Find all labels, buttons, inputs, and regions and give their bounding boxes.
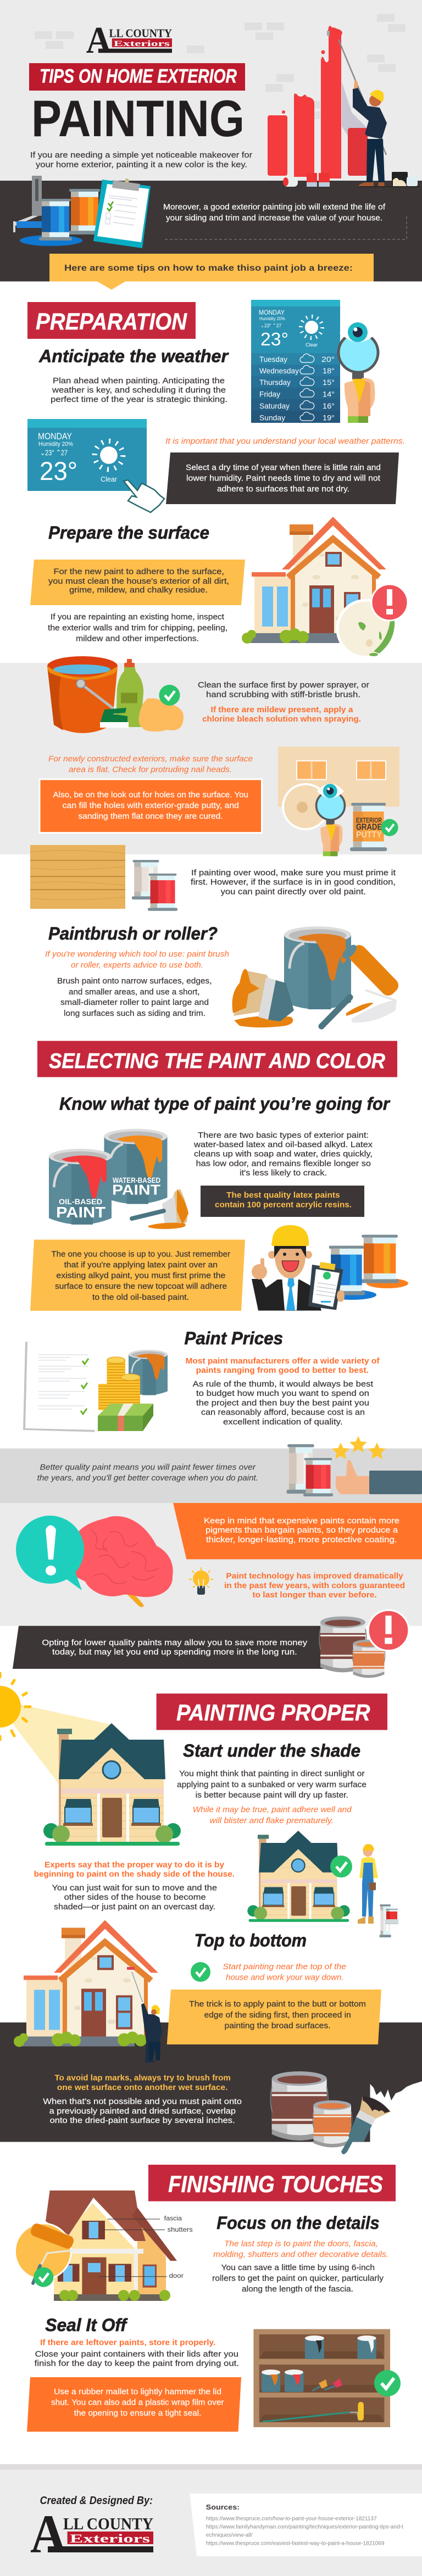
heading: seal it off: Seal It Off [45,2315,128,2335]
panel: best quality latex: contain 100 percent acrylic resins. [215,1201,352,1210]
text: lap marks: one wet surface onto another wet surface. [57,2083,227,2092]
logo: All County Exteriors: A [86,20,112,62]
section heading: painting proper: PAINTING PROPER [176,1700,370,1725]
text: last step: molding, shutters and other decorative details. [213,2250,388,2259]
weather forecast panel: 15° [323,378,335,387]
text: leftover paints: If there are leftover paints, store it properly. [40,2339,215,2348]
illustration: wall, magnifier, putty can: PUTTY [356,830,382,840]
illustration: wall, magnifier, putty can: EXTERIOR [356,816,382,824]
icon: green check [191,1962,210,1982]
weather forecast panel: 16° [323,401,335,410]
logo: All County Exteriors: LL COUNTY [109,26,172,40]
text: paint technology: to last longer than ever before. [252,1591,377,1600]
text: plan ahead [51,377,227,404]
illustration: water and oil paint cans: PAINT [56,1204,106,1221]
text: brush paint: long surfaces such as siding and trim. [64,1009,206,1018]
section heading: finishing touches [148,2165,396,2201]
panel: adhere to surface: you must clean the house's exterior of all dirt, [48,577,229,586]
text: when not possible: a previously painted and dried surface, overlap [49,2107,236,2116]
panel: rubber mallet: Use a rubber mallet to lightly hammer the lid [54,2388,221,2396]
weather card [27,419,147,491]
text: when not possible: When that's not possible and you must paint onto [43,2098,242,2106]
text: plan ahead: weather is key, and scheduling it during the [52,386,226,395]
illustration: water and oil paint cans: WATER-BASED [113,1176,160,1184]
panel: the trick: The trick is to apply paint to the butt or bottom [189,2000,366,2009]
text: close containers: Close your paint containers with their lids after you [35,2350,238,2359]
logo: All County Exteriors: Exteriors [114,39,170,48]
panel: dry time of year: lower humidity. Paint needs time to dry and will not [186,474,380,483]
text: two types of paint: it's less likely to crack. [240,1169,327,1178]
footer credit: created and designed by: Created & Designed By: [40,2495,153,2507]
section heading: selecting the paint and color [37,1041,397,1077]
text: clean the surface: hand scrubbing with stiff-bristle brush. [206,691,360,700]
panel: sources [190,2494,422,2556]
weather forecast panel: 20° [321,355,335,364]
callout: better quality paint: Better quality paint means you will paint fewer times over [40,1463,256,1472]
text: wait for sun: shaded—or just paint on an overcast day. [54,1903,215,1912]
heading: anticipate the weather: Anticipate the weather [38,346,229,366]
intro text: your home exterior, painting it a new color is the key. [36,160,247,169]
panel: best quality latex [201,1186,364,1217]
text: two types of paint: There are two basic types of exterior paint: [198,1131,369,1140]
text: lap marks: To avoid lap marks, always try to brush from [54,2074,231,2083]
text: paint technology: in the past few years, with colors guaranteed [224,1582,405,1590]
text: lap marks [54,2074,231,2092]
illustration: sun with light beam [0,1672,115,1785]
text: manufacturers offer [186,1357,380,1375]
text: experts say: beginning to paint on the shady side of the house. [34,1870,235,1879]
text: newly constructed: For newly constructed exteriors, make sure the surface [48,755,253,763]
weather forecast panel: Clear [306,342,318,348]
text: moreover: your siding and trim and increase the value of your house. [166,214,382,223]
text: direct sunlight [177,1769,367,1800]
text: when not possible: onto the dried-paint surface by several inches. [50,2116,235,2125]
intro text [30,151,252,169]
callout: expensive paints [173,1503,422,1560]
panel: lower quality paints [13,1626,324,1669]
panel: the one you choose: that if you're applying latex paint over an [64,1261,218,1270]
text: experts say [34,1860,235,1879]
footer logo [30,2504,153,2564]
text: paint technology: Paint technology has improved dramatically [226,1572,403,1581]
text: start near the top: house and work your way down. [226,1973,344,1982]
text: mildew warning: If there are mildew present, apply a [211,706,354,714]
decorative bricks [35,14,406,119]
text: repainting: the exterior walls and trim for chipping, peeling, [48,624,227,633]
text: newly constructed: area is flat. Check for protruding nail heads. [69,765,232,774]
panel: rubber mallet: shut. You can also add a plastic wrap film over [51,2398,224,2407]
illustration: contractor with clipboard and cans [252,1225,408,1311]
text: blister warning: will blister and flake prematurely. [210,1816,334,1825]
panel: sources: https://www.thespruce.com/easiest-fastest-way-to-paint-a-house-1821069 [206,2540,385,2546]
illustration: small house with worker [247,1831,398,1937]
illustration: orange roof house with painter [14,1920,162,2063]
text: moreover: Moreover, a good exterior painting job will extend the life of [163,203,386,212]
panel: sources: Sources: [206,2503,240,2511]
weather card: ⌄23° ⌃27 [40,448,68,457]
illustration: wood planks and cans [30,845,177,911]
weather forecast panel: Friday [259,390,280,399]
panel: sources: https://www.thespruce.com/how-to-paint-your-house-exterior-1821137 [206,2515,377,2522]
illustration: cans, thumbs up, stars [287,1436,422,1496]
weather forecast panel: 23° [260,329,288,349]
icon: magnifier with eye [338,322,378,423]
weather forecast panel: 19° [323,413,335,422]
panel: sources: echniques/view-all/ [206,2532,252,2538]
weather card: 23° [40,456,77,485]
callout: expensive paints: Keep in mind that expensive paints contain more [204,1517,399,1526]
weather card: Humidity 20% [38,441,73,448]
illustration: bucket, bottle, sponge [47,656,184,733]
text: experts say: Experts say that the proper way to do it is by [45,1860,224,1869]
text: 6-inch rollers: You can save a little time by using 6-inch [221,2264,375,2272]
section heading: selecting the paint and color: SELECTING THE PAINT AND COLOR [49,1049,385,1073]
panel: the one you choose [30,1240,245,1311]
weather forecast panel: 14° [323,390,335,399]
text: painting over wood: you can paint directly over old paint. [221,888,366,897]
heading: paintbrush or roller: Paintbrush or roller? [48,924,218,943]
text: tool advice [45,949,229,970]
text: clean the surface [198,681,369,700]
text: wait for sun [52,1884,217,1912]
illustration: brown roof house with labels [15,2191,193,2301]
weather card: MONDAY [38,431,72,442]
heading: start under the shade: Start under the shade [183,1741,360,1761]
panel: the one you choose: existing alkyd paint, you must first prime the [56,1272,225,1281]
text: start near the top: Start painting near the top of the [223,1962,346,1971]
weather forecast panel: MONDAY [259,309,285,316]
panel: best quality latex: The best quality latex paints [226,1191,340,1200]
illustration: wall, magnifier, putty can: GRADE [356,823,382,832]
text: repainting: If you are repainting an existing home, inspect [51,613,224,622]
text: moreover [163,203,407,239]
section heading: preparation: PREPARATION [36,309,187,335]
text: last step [213,2239,388,2259]
text: wait for sun: You can just wait for sun to move and the [52,1884,217,1892]
panel: the one you choose: to the old oil-based paint. [92,1293,189,1302]
text: rule of thumb: can reasonably afford, because cost is an [201,1409,365,1417]
heading: top to bottom: Top to bottom [195,1931,307,1951]
text: rule of thumb: the project and then buy the best paint you [196,1399,369,1408]
illustration: cheap paint buckets with alert [319,1610,409,1678]
panel: holes on surface [40,779,262,833]
panel: holes on surface: sanding them flat once they are cured. [78,812,223,821]
text: two types of paint: cleans up with soap and water, dries quickly, [194,1150,373,1159]
weather forecast panel: ⌄23° ⌃27 [260,323,281,329]
text: direct sunlight: applying paint to a sunbaked or very warm surface [177,1780,367,1789]
section heading: preparation [27,302,196,339]
text: two types of paint: has low odor, and remains flexible longer so [196,1159,371,1168]
text: rule of thumb [193,1380,373,1427]
text: manufacturers offer: paints ranging from good to better to best. [196,1366,369,1375]
callout: expensive paints: thicker, longer-lasting, more protective coating. [206,1535,397,1544]
panel: holes on surface: can fill the holes with exterior-grade putty, and [63,802,239,811]
text: brush paint: small-diameter roller to paint large and [60,998,209,1007]
illustration: wall, magnifier, putty can [278,747,399,856]
panel: dry time of year: Select a dry time of year when there is little rain and [186,463,381,472]
text: plan ahead: Plan ahead when painting. Anticipating the [53,377,225,385]
text: when not possible [43,2098,242,2125]
text: tool advice: or roller, experts advice to use both. [71,960,203,970]
text: repainting: mildew and other imperfections. [76,635,199,644]
callout: better quality paint: the years, and you'll get better coverage when you do paint. [37,1473,258,1483]
panel: sources: https://www.familyhandyman.com/painting/techniques/exterior-painting-tips-and-t [206,2523,403,2530]
weather forecast panel: Humidity 20% [259,316,285,321]
text: brush paint [57,977,212,1018]
weather forecast panel: Saturday [259,401,290,410]
text: start near the top [223,1962,346,1982]
illustration: water and oil paint cans: PAINT [112,1182,160,1198]
callout: local weather patterns: It is important that you understand your local weather patterns. [165,437,405,446]
illustration: buckets and brush [270,2071,391,2154]
illustration: brain with alert bubble [16,1516,173,1607]
panel: the one you choose: surface to ensure the new topcoat will adhere [55,1282,227,1291]
text: mildew warning [202,706,361,724]
title banner: TIPS ON HOME EXTERIOR [40,66,237,87]
panel: the one you choose: The one you choose is up to you. Just remember [52,1250,230,1259]
text: blister warning [193,1805,352,1825]
text: repainting [48,613,227,644]
weather forecast panel: Thursday [259,378,291,387]
heading: know what type: Know what type of paint you’re going for [59,1094,390,1114]
text: blister warning: While it may be true, paint adhere well and [193,1805,352,1814]
text: 6-inch rollers: along the length of the fascia. [242,2285,353,2294]
text: mildew warning: chlorine bleach solution when spraying. [202,715,361,724]
illustration: brown roof house with labels: shutters [168,2226,193,2233]
heading: focus on the details: Focus on the details [216,2213,380,2233]
text: manufacturers offer: Most paint manufacturers offer a wide variety of [186,1357,380,1366]
illustration: water and oil paint cans: OIL-BASED [59,1197,102,1206]
text: 6-inch rollers: rollers to get the paint on quicker, particularly [212,2275,384,2283]
illustration: storage shelf [253,2329,401,2427]
panel: dry time of year: adhere to surfaces that are not dry. [217,485,349,494]
illustration: orange roof house with inspection circle [242,517,408,657]
text: painting over wood: first. However, if the surface is in in good condition, [191,878,396,887]
text: 6-inch rollers [212,2264,384,2294]
illustration: teal roof house [43,1723,181,1846]
callout: expensive paints: pigments than bargain paints, so they produce a [206,1526,398,1535]
text: newly constructed [48,755,253,774]
weather forecast panel: 18° [323,366,335,375]
section heading: finishing touches: FINISHING TOUCHES [168,2171,383,2198]
weather forecast panel: Tuesday [259,355,287,364]
text: clean the surface: Clean the surface first by power sprayer, or [198,681,369,690]
text: close containers [35,2350,239,2368]
panel: holes on surface: Also, be on the look out for holes on the surface. You [53,791,248,800]
footer logo: Exteriors [70,2532,151,2545]
text: close containers: finish for the day to keep the paint from drying out. [35,2360,239,2368]
text: rule of thumb: excellent indication of quality. [223,1418,343,1427]
footer logo: LL COUNTY [63,2514,153,2533]
footer logo: A [30,2504,66,2564]
panel: dry time of year [166,452,399,504]
weather card: Clear [101,475,118,483]
text: rule of thumb: As rule of the thumb, it would always be best [193,1380,373,1389]
text: paint technology [224,1572,405,1600]
panel: rubber mallet [27,2377,241,2432]
intro text: If you are needing a simple yet noticeable makeover for [30,151,252,160]
panel: lower quality paints: today, but may let you end up spending more in the long run. [52,1648,297,1657]
illustration: brown roof house with labels: fascia [164,2214,182,2222]
text: two types of paint: water-based latex and oil-based alkyd. Latex [193,1141,373,1149]
illustration: painter and red stripes [268,26,420,187]
callout: tips banner [49,254,374,290]
title: PAINTING: PAINTING [31,90,245,147]
text: plan ahead: perfect time of the year is strategic thinking. [51,395,227,404]
text: brush paint: and smaller areas, and use a short, [69,988,200,997]
weather forecast panel: Sunday [259,413,285,422]
panel: lower quality paints: Opting for lower quality paints may allow you to save more money [42,1639,308,1647]
text: rule of thumb: to budget how much you want to spend on [196,1389,369,1398]
text: painting over wood [191,869,396,897]
callout: better quality paint [37,1463,258,1483]
panel: the trick [167,1990,381,2044]
text: wait for sun: other sides of the house to become [64,1893,206,1902]
illustration: paint cans and clipboard [13,176,151,248]
text: direct sunlight: is better because paint will dry up faster. [196,1791,348,1800]
text: last step: The last step is to paint the doors, fascia, [224,2239,378,2249]
heading: prepare the surface: Prepare the surface [48,523,209,543]
panel: adhere to surface: grime, mildew, and chalky residue. [69,586,208,595]
illustration: checklist, coins, money, can [23,1342,168,1432]
panel: rubber mallet: the opening to ensure a tight seal. [74,2409,201,2418]
panel: adhere to surface: For the new paint to adhere to the surface, [54,568,224,577]
illustration: water and oil paint cans [49,1129,188,1229]
weather forecast panel: Wednesday [259,366,299,375]
icon: light bulb [189,1567,213,1595]
text: painting over wood: If painting over wood, make sure you must prime it [191,869,396,878]
panel: adhere to surface [30,560,245,605]
illustration: brush, can and roller [232,926,401,1027]
icon: pointer hand [124,480,164,512]
logo: All County Exteriors [86,20,172,62]
text: tool advice: If you're wondering which tool to use: paint brush [45,949,229,959]
panel: the trick: painting the broad surfaces. [224,2022,331,2031]
section heading: painting proper [157,1694,387,1730]
weather forecast panel [251,300,340,423]
heading: paint prices: Paint Prices [185,1328,283,1348]
text: brush paint: Brush paint onto narrow surfaces, edges, [57,977,212,986]
illustration: brown roof house with labels: door [169,2272,184,2279]
text: direct sunlight: You might think that painting in direct sunlight or [179,1769,365,1778]
callout: tips banner: Here are some tips on how to make thiso paint job a breeze: [64,264,353,273]
text: two types of paint [193,1131,373,1178]
panel: the trick: edge of the siding first, then proceed in [204,2011,351,2020]
title banner [29,63,245,91]
